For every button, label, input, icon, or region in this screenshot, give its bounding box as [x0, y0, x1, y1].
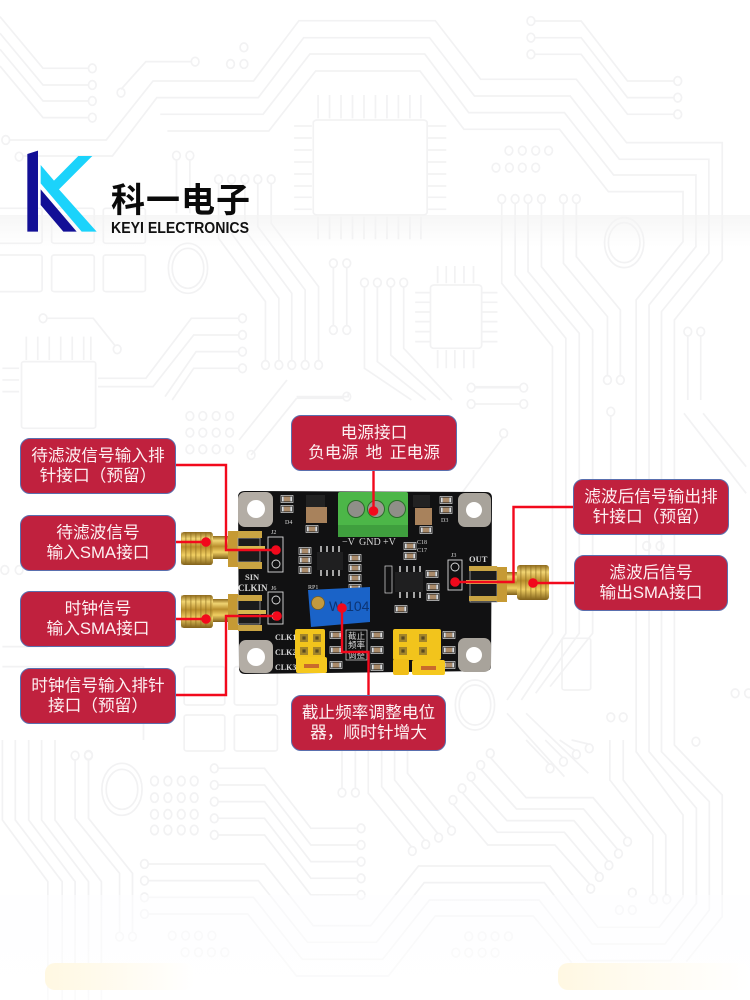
- power terminal block: [338, 492, 408, 537]
- cutoff adjust silkscreen label: 频率: [348, 640, 366, 650]
- cutoff adjust silkscreen label: 截止: [348, 631, 366, 641]
- cutoff adjust silkscreen label: [346, 630, 367, 660]
- SMA connector OUT: OUT: [469, 554, 488, 564]
- SMA connector CLKIN: CLKIN: [238, 583, 268, 593]
- terminal labels: +V: [383, 537, 397, 548]
- silkscreen reference labels: D4: [285, 520, 292, 526]
- callout: filtered output header: [573, 479, 729, 535]
- clock silkscreen labels: [275, 633, 296, 672]
- clock silkscreen labels: CLK2: [275, 648, 296, 657]
- circuit board: [238, 491, 492, 674]
- pin headers: [268, 537, 462, 624]
- callout: power connector: 负电源 地 正电源: [308, 443, 440, 462]
- callout: signal input header: 针接口（预留）: [40, 466, 156, 485]
- callout: clock input header: 时钟信号输入排针: [31, 676, 165, 695]
- callout: signal input SMA: [20, 515, 176, 571]
- logo English name: KEYI ELECTRONICS: [111, 220, 249, 237]
- callout: signal input header: 待滤波信号输入排: [31, 446, 165, 465]
- silkscreen reference labels: RP1: [308, 585, 318, 591]
- callout: power connector: 电源接口: [341, 423, 407, 442]
- leader: potentiometer: [338, 604, 368, 695]
- SMA connector CLKIN: [181, 583, 268, 631]
- blue trimmer potentiometer: W 104: [329, 598, 370, 614]
- callout: cutoff potentiometer: 截止频率调整电位: [302, 703, 435, 722]
- callout: filtered output header: 滤波后信号输出排: [584, 487, 718, 506]
- silkscreen reference labels: C17: [417, 548, 427, 554]
- leader: signal SMA: [176, 538, 210, 546]
- silkscreen reference labels: J2: [271, 530, 276, 536]
- terminal labels: GND: [359, 537, 381, 548]
- decorative yellow pill left: [45, 963, 195, 990]
- IC chips: [317, 546, 423, 598]
- callout: filtered output SMA: [574, 555, 728, 611]
- leader: output SMA: [529, 579, 574, 587]
- decorative yellow pill right: [558, 963, 750, 990]
- terminal labels: −V: [342, 537, 356, 548]
- background: upper grey fade band: [0, 215, 750, 247]
- callout: clock input header: [20, 668, 176, 724]
- leader: power: [370, 471, 377, 515]
- silkscreen reference labels: [271, 518, 456, 592]
- logo Chinese name: 科一电子: [111, 182, 250, 220]
- leader: clock SMA: [176, 615, 210, 623]
- SMA connector SIN: [181, 531, 265, 582]
- callout: signal input SMA: 待滤波信号: [56, 523, 140, 542]
- callout: clock input SMA: [20, 591, 176, 647]
- silkscreen reference labels: J6: [271, 586, 276, 592]
- callout: power connector: [291, 415, 457, 471]
- yellow jumper J5: [393, 629, 445, 675]
- yellow jumper J4: [295, 629, 327, 673]
- cutoff adjust silkscreen label: 调整: [348, 650, 366, 660]
- blue trimmer potentiometer: [308, 587, 370, 627]
- callout: signal input SMA: 输入SMA接口: [47, 543, 149, 562]
- background: lower white fade: [0, 895, 750, 1000]
- leader: signal header: [176, 465, 280, 554]
- callout: clock input SMA: 输入SMA接口: [47, 619, 149, 638]
- silkscreen reference labels: D3: [441, 518, 448, 524]
- callout: clock input SMA: 时钟信号: [65, 599, 131, 618]
- silkscreen reference labels: J3: [451, 553, 456, 559]
- callout: filtered output SMA: 滤波后信号: [609, 563, 693, 582]
- leader: clock header: [176, 612, 281, 695]
- logo mark K: [27, 151, 97, 232]
- callout: cutoff potentiometer: 器，顺时针增大: [310, 723, 427, 742]
- terminal labels: [342, 537, 397, 548]
- capacitors and diodes: [306, 495, 432, 525]
- callout: cutoff potentiometer: [291, 695, 446, 751]
- mounting holes: [238, 492, 491, 673]
- clock silkscreen labels: CLK3: [275, 663, 296, 672]
- surface mount components: [281, 496, 455, 670]
- callout: clock input header: 接口（预留）: [48, 696, 148, 715]
- callout: filtered output SMA: 输出SMA接口: [600, 583, 702, 602]
- callout: filtered output header: 针接口（预留）: [593, 507, 709, 526]
- clock silkscreen labels: CLK1: [275, 633, 296, 642]
- SMA connector OUT: [466, 554, 549, 602]
- leader: output header: [451, 507, 573, 586]
- silkscreen reference labels: C18: [417, 540, 427, 546]
- callout: signal input header: [20, 438, 176, 494]
- SMA connector SIN: SIN: [245, 572, 260, 582]
- logo: KEYI ELECTRONICS: [27, 150, 250, 237]
